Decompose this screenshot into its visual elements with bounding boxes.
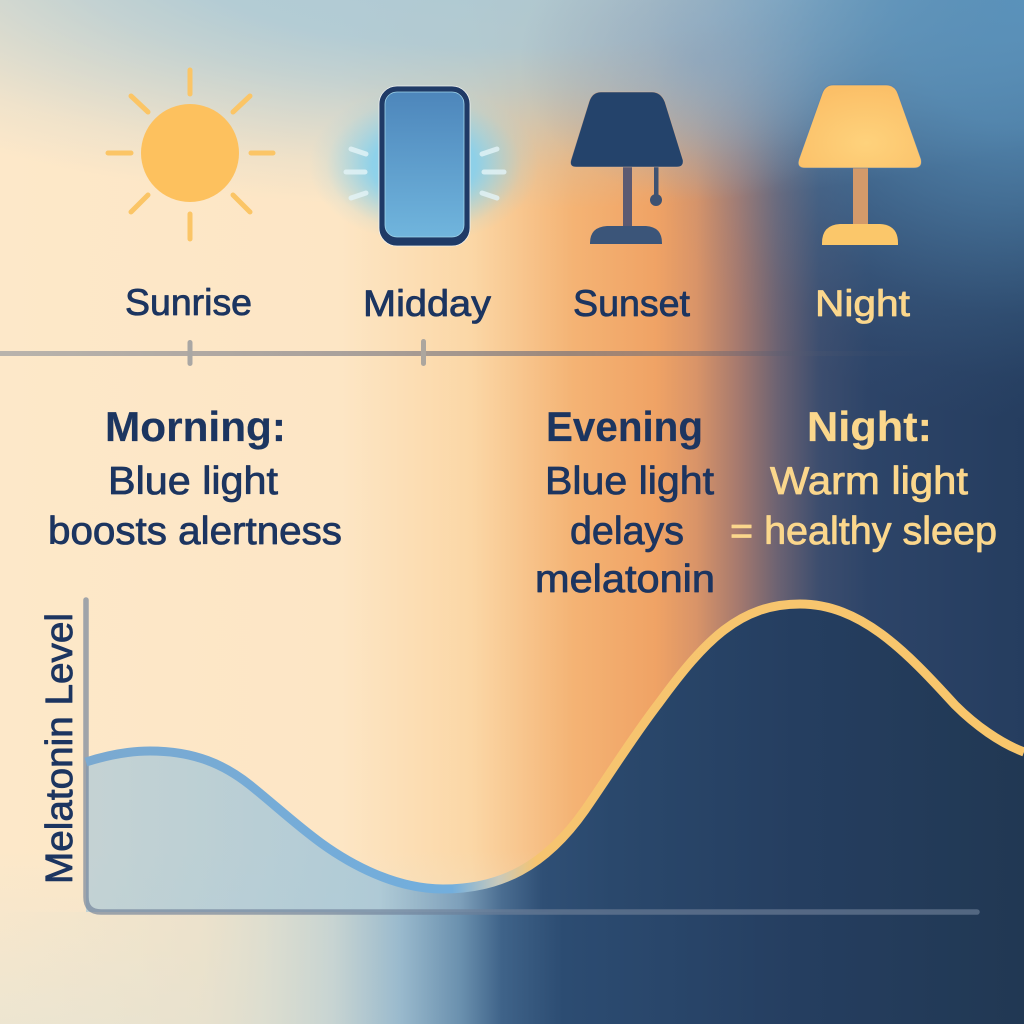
text block: night: Night:: [807, 403, 932, 450]
text block: morning: Blue light: [108, 460, 278, 503]
icon: sun: [108, 70, 273, 239]
icon: smartphone with blue glow: [309, 86, 539, 246]
text block: evening: melatonin: [535, 558, 715, 601]
axes: [86, 600, 977, 912]
label: Sunset: Sunset: [573, 283, 691, 324]
text block: night: Warm light: [770, 460, 968, 503]
text block: night: = healthy sleep: [730, 510, 997, 553]
area under curve: [86, 604, 1024, 912]
melatonin curve: [86, 604, 1024, 889]
text block: night: [730, 403, 997, 553]
timeline: [0, 339, 950, 366]
text block: evening: Blue light: [545, 460, 714, 503]
text block: morning: [48, 403, 342, 553]
text block: evening: delays: [570, 510, 684, 553]
text block: evening: Evening: [546, 403, 703, 450]
label: Sunrise: Sunrise: [125, 282, 252, 323]
icon: warm lamp: [798, 85, 921, 245]
text block: morning: boosts alertness: [48, 510, 342, 553]
icon: dark lamp: [571, 92, 683, 244]
label: Midday: Midday: [363, 283, 492, 324]
text block: morning: Morning:: [105, 403, 286, 450]
y-axis label: Melatonin Level: [39, 613, 81, 884]
text block: evening: [535, 403, 715, 601]
label: Night: Night: [815, 283, 911, 324]
melatonin chart: [39, 600, 1024, 912]
